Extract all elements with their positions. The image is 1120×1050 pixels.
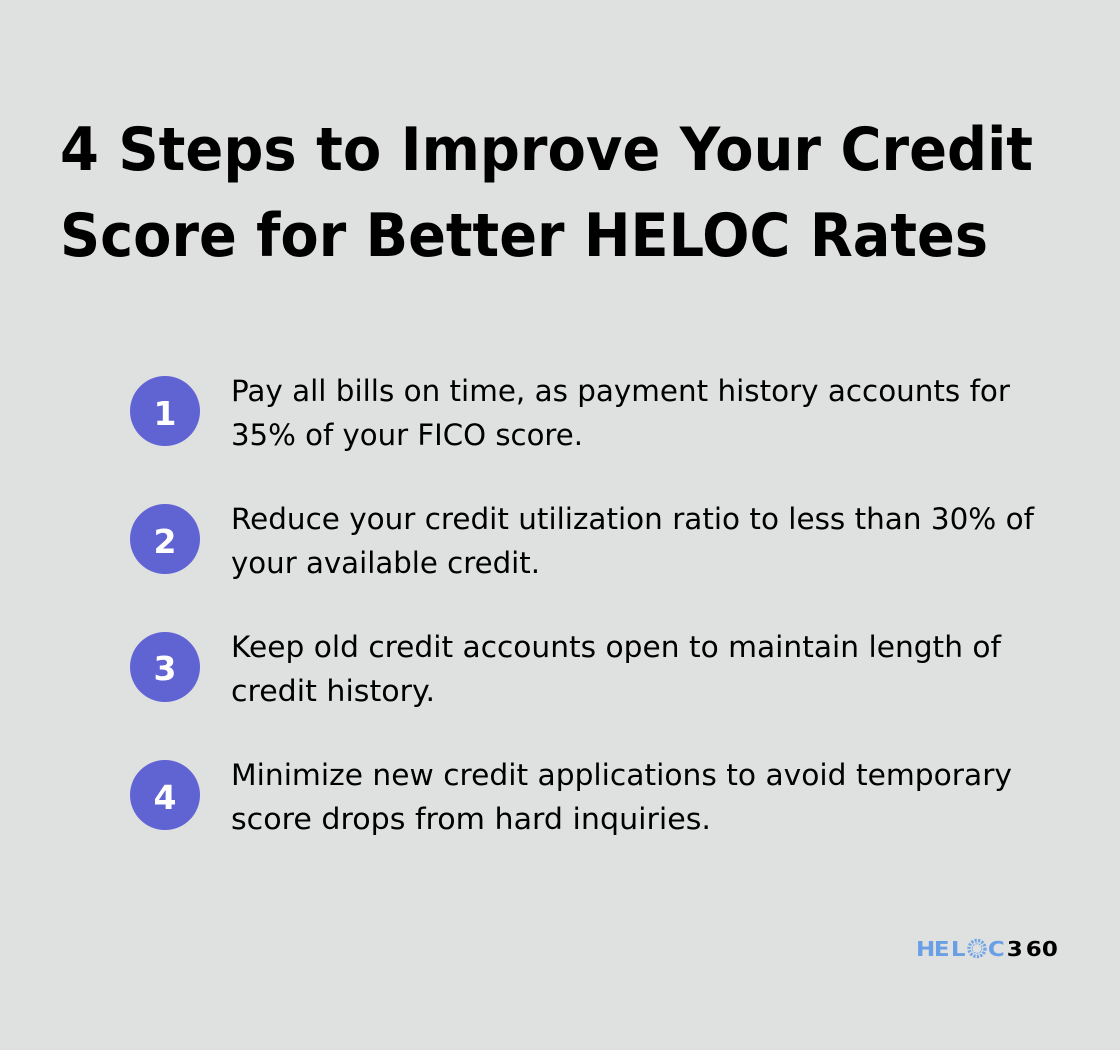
step 4 number badge — [130, 760, 200, 830]
logo: HELOC — [916, 938, 1005, 962]
step 3 text — [231, 630, 1002, 708]
icon: logo swirl — [969, 940, 985, 956]
step 4 — [130, 758, 1012, 836]
step 4 number badge: 4 — [154, 778, 176, 817]
step 2 text — [231, 502, 1035, 580]
step 4 text: Minimize new credit applications to avoid temporary — [231, 758, 1012, 792]
step 3 text: Keep old credit accounts open to maintain length of — [231, 630, 1002, 664]
step 1 text: 35% of your FICO score. — [231, 418, 583, 452]
step 3 number badge: 3 — [154, 649, 176, 688]
step 3 text: credit history. — [231, 674, 435, 708]
title: Score for Better HELOC Rates — [60, 201, 988, 271]
step 3 — [130, 630, 1002, 708]
logo — [916, 938, 1058, 962]
step 4 text: score drops from hard inquiries. — [231, 802, 711, 836]
step 2 text: Reduce your credit utilization ratio to less than 30% of — [231, 502, 1035, 536]
step 1 number badge: 1 — [154, 394, 176, 433]
step 1 — [130, 374, 1011, 452]
step 1 text — [231, 374, 1011, 452]
logo: 360 — [1007, 938, 1058, 962]
step 2 — [130, 502, 1035, 580]
step 2 number badge — [130, 504, 200, 574]
title: 4 Steps to Improve Your Credit — [60, 115, 1033, 185]
step 2 number badge: 2 — [154, 522, 176, 561]
step 4 text — [231, 758, 1012, 836]
step 2 text: your available credit. — [231, 546, 540, 580]
title — [60, 115, 1033, 271]
step 1 number badge — [130, 376, 200, 446]
step 3 number badge — [130, 632, 200, 702]
step 1 text: Pay all bills on time, as payment history accounts for — [231, 374, 1011, 408]
